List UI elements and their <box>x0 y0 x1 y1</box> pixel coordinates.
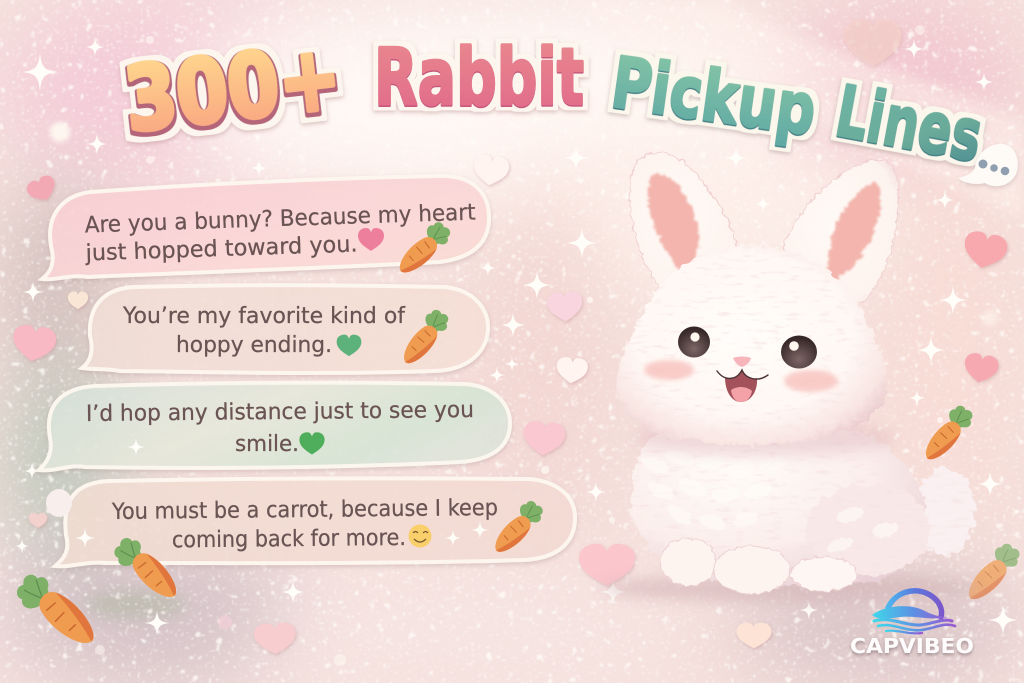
bunny haunch <box>806 484 930 576</box>
message two text: You’re my favorite kind of <box>122 303 406 329</box>
heart right top <box>960 229 1009 272</box>
heart top right faint <box>844 19 902 66</box>
panel: message bubble two <box>82 285 488 373</box>
bunny paws <box>660 538 857 594</box>
heart left big pink <box>10 323 58 364</box>
bunny right ear <box>783 160 899 303</box>
white bubble dot <box>46 489 72 517</box>
heart beside bubble three <box>522 420 566 457</box>
panel: message bubble three <box>39 383 510 470</box>
heart small left lower <box>29 513 47 528</box>
logo wordmark: CAPVIBEO <box>850 634 974 658</box>
logo arch <box>888 591 942 617</box>
title: Pickup: Pickup <box>607 42 821 151</box>
sparkle <box>127 438 145 456</box>
icon: carrot <box>398 308 454 364</box>
bunny left ear <box>630 153 738 294</box>
bunny left eye <box>678 326 710 358</box>
icon: typing speech bubble <box>958 144 1018 186</box>
logo waves <box>872 606 955 633</box>
message one text: Are you a bunny? Because my heart <box>84 200 476 238</box>
icon: carrot right <box>921 405 977 460</box>
bunny illustration <box>600 153 980 602</box>
message four text: coming back for more. <box>172 525 406 553</box>
panel: message bubble one <box>42 176 489 279</box>
bunny nose <box>733 356 751 367</box>
message two text: hoppy ending. <box>176 332 332 358</box>
heart bottom right pale <box>736 623 772 648</box>
heart left cream <box>68 292 88 309</box>
title: 300+: 300+ <box>120 25 346 152</box>
icon: carrot <box>493 500 545 552</box>
icon: carrot on bubble four <box>114 536 176 599</box>
icon: carrot <box>400 222 450 272</box>
bunny cheeks <box>644 360 838 392</box>
message two text <box>122 303 406 358</box>
bunny mouth <box>717 370 768 402</box>
message four text <box>111 495 498 553</box>
message one text <box>83 200 477 266</box>
heart left pink <box>24 173 60 206</box>
heart bottom pale <box>253 622 297 655</box>
icon: green heart <box>299 432 325 455</box>
bunny chest tufts <box>639 447 900 555</box>
icon: pink heart <box>358 228 384 251</box>
icon: smiling face <box>408 524 432 548</box>
icon: carrot behind bunny <box>966 543 1022 599</box>
icon: carrot bottom left <box>16 570 94 649</box>
bunny body <box>630 425 926 587</box>
message three text: I’d hop any distance just to see you <box>86 397 474 427</box>
panel: message bubble four <box>46 478 575 566</box>
sparkles <box>75 521 489 548</box>
icon: green heart <box>337 335 361 356</box>
title: Rabbit: Rabbit <box>374 33 584 123</box>
bunny head <box>617 245 886 445</box>
message four text: You must be a carrot, because I keep <box>111 495 498 525</box>
heart right small <box>962 352 1000 385</box>
heart centre white <box>555 356 589 385</box>
heart below bubble four <box>579 544 635 586</box>
heart centre pale <box>546 291 584 323</box>
bunny tail <box>915 469 975 555</box>
message one text: just hopped toward you. <box>84 231 358 266</box>
logo: CAPVIBEO <box>850 591 974 658</box>
message three text <box>86 397 474 457</box>
title <box>120 25 988 177</box>
bunny head shadow on body <box>635 420 895 456</box>
bunny right eye <box>781 336 817 368</box>
heart top white <box>471 153 510 188</box>
bunny ground shadow <box>600 574 980 602</box>
message three text: smile. <box>235 431 299 457</box>
